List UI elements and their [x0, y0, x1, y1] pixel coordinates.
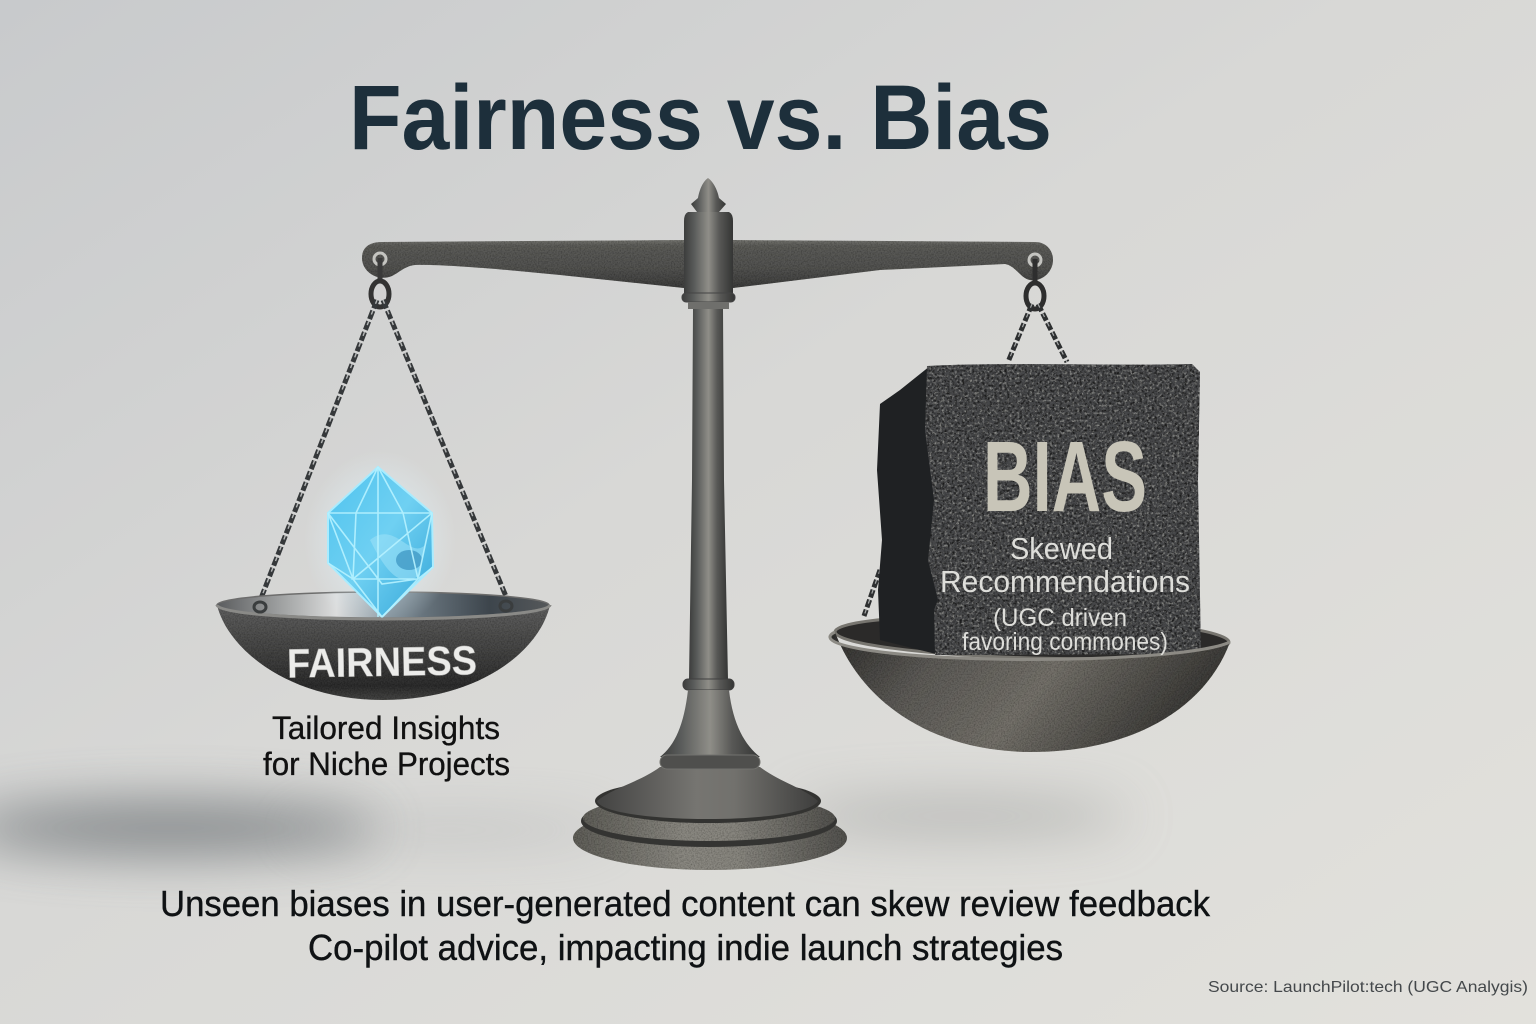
base upper groove	[595, 779, 821, 823]
bias caption: Recommendations	[940, 564, 1190, 599]
bias caption	[940, 531, 1190, 656]
fairness caption: Tailored Insights	[272, 710, 500, 746]
floor shadows	[0, 798, 1130, 854]
fairness caption: for Niche Projects	[263, 746, 510, 782]
source note: Source: LaunchPilot:tech (UGC Analygis)	[1208, 979, 1528, 996]
summary text: Unseen biases in user-generated content can skew review feedback	[160, 883, 1211, 924]
hub	[684, 212, 733, 293]
base middle tier	[583, 795, 835, 841]
base bottom tier	[573, 806, 847, 870]
summary text	[160, 883, 1211, 968]
column	[689, 309, 728, 680]
left pan: fairness	[217, 450, 550, 700]
base groove	[581, 795, 837, 847]
pan bowl	[217, 605, 550, 700]
collar bottom	[683, 679, 734, 690]
bias caption: (UGC driven	[993, 604, 1127, 632]
left chains	[258, 300, 510, 606]
pan interior	[835, 611, 1229, 663]
pivot rings	[371, 253, 1044, 309]
bias caption: Skewed	[1010, 531, 1113, 566]
pan bowl	[830, 632, 1230, 752]
title: Fairness vs. Bias	[349, 67, 1052, 169]
right chains	[864, 304, 1067, 616]
bias label: BIAS	[983, 421, 1147, 533]
right pan: bias	[830, 364, 1230, 752]
balance scale stand	[362, 178, 1053, 870]
flare	[660, 690, 760, 757]
beam	[362, 240, 1053, 288]
pan interior	[217, 592, 549, 618]
fairness caption	[263, 710, 510, 782]
fairness label: FAIRNESS	[287, 637, 477, 687]
base dome	[597, 767, 818, 819]
flare ring	[660, 755, 760, 769]
stone block	[877, 364, 1201, 655]
collar top	[682, 293, 735, 302]
pan rim	[217, 605, 550, 619]
bias caption: favoring commones)	[962, 628, 1168, 656]
pan rim	[830, 632, 1230, 659]
icon: glowing crystal	[304, 450, 456, 630]
chain anchors	[254, 601, 512, 612]
summary text: Co-pilot advice, impacting indie launch strategies	[308, 927, 1063, 968]
finial	[691, 178, 726, 212]
